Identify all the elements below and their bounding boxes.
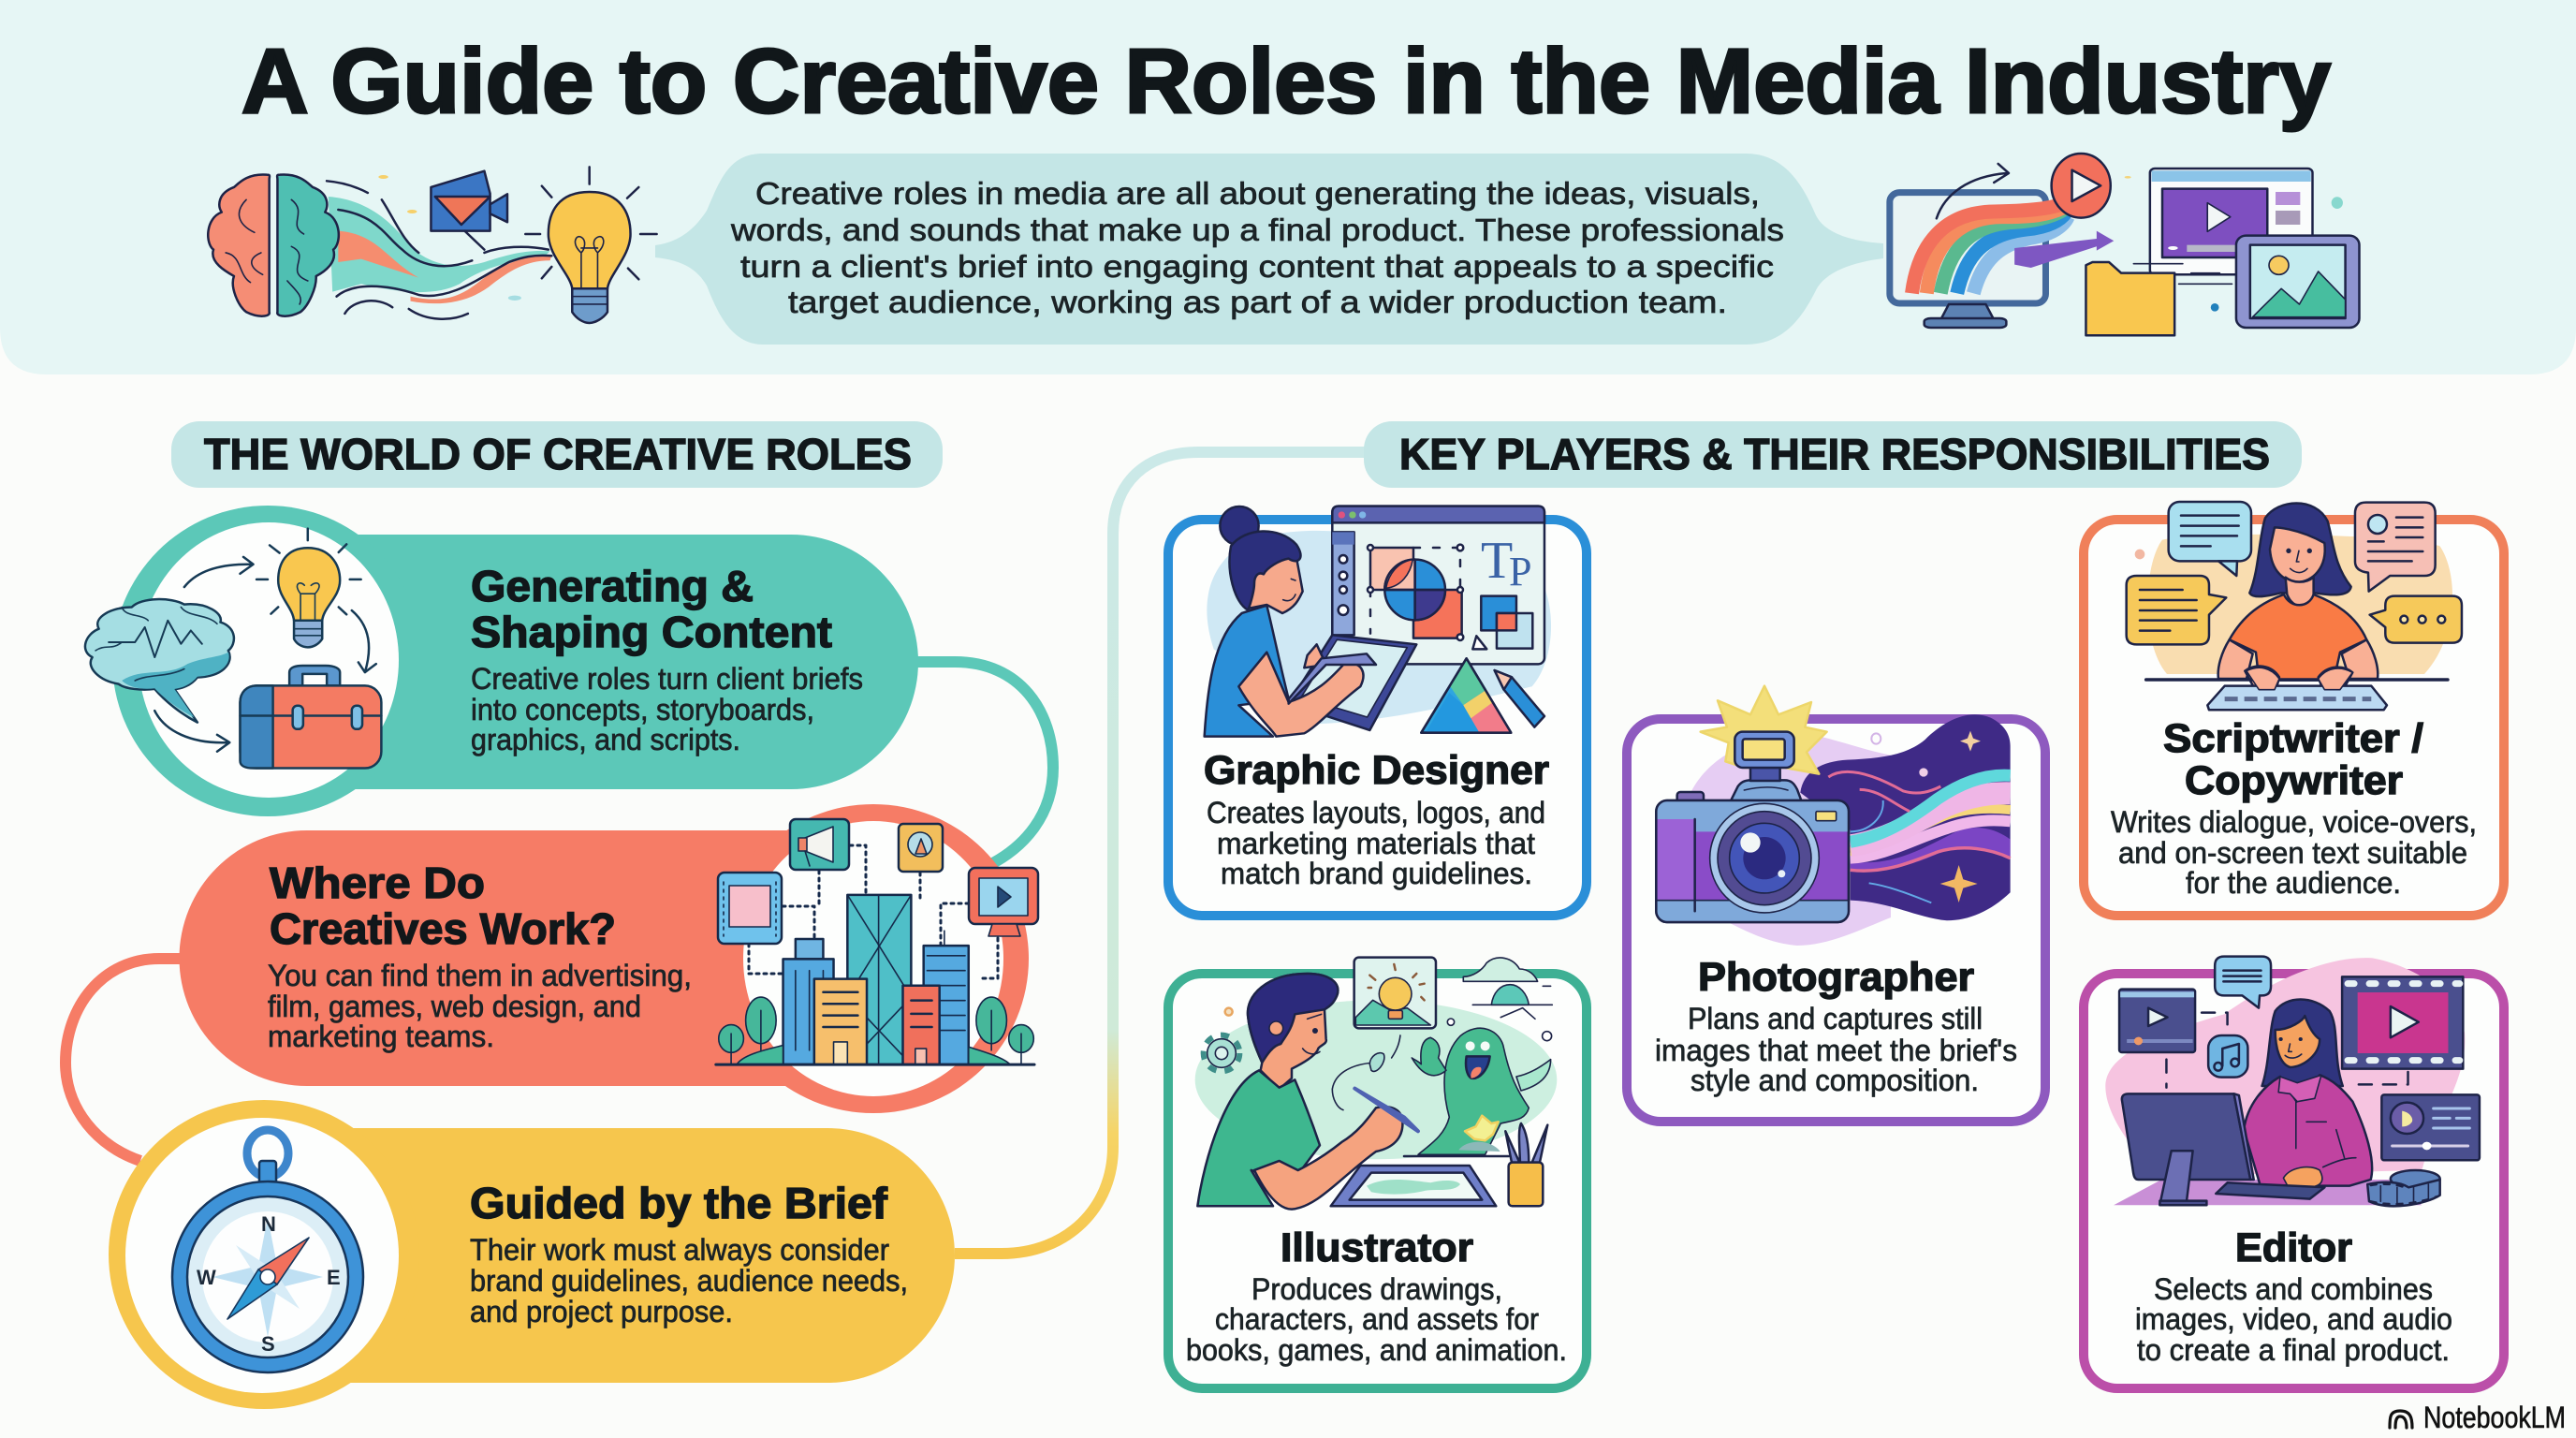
text: photographer: images that meet the brief's: [1655, 1034, 2017, 1067]
intro text: target audience, working as part of a wider production team.: [788, 285, 1727, 319]
icon: brain, bulb, toolbox cycle: [85, 529, 381, 769]
illustration: camera with light stream: [1656, 686, 2011, 946]
text: editor: Editor: [2235, 1225, 2352, 1270]
section heading: key players: [1364, 421, 2302, 488]
type sample glyphs: T: [1481, 532, 1513, 590]
text: where do creatives work: film, games, web design, and: [268, 990, 641, 1023]
text: generating and shaping content: graphics, and scripts.: [471, 723, 740, 756]
intro text: words, and sounds that make up a final product. These professionals: [730, 213, 1784, 247]
title: A Guide to Creative Roles in the Media Industry: [242, 30, 2331, 132]
intro text: Creative roles in media are all about generating the ideas, visuals,: [755, 176, 1760, 211]
text: generating and shaping content: into concepts, storyboards,: [471, 693, 814, 726]
section heading: key players: KEY PLAYERS & THEIR RESPONSIBILITIES: [1399, 430, 2270, 478]
text: editor: Selects and combines: [2154, 1272, 2433, 1306]
text: editor: [2135, 1225, 2452, 1367]
text: where do creatives work: marketing teams.: [268, 1020, 494, 1053]
text: scriptwriter / copywriter: Scriptwriter /: [2163, 716, 2423, 761]
connector: teal to coral: [913, 662, 1053, 866]
connector: coral to yellow: [66, 959, 183, 1161]
text: illustrator: [1186, 1225, 1567, 1367]
connector: roles panels to key players: [955, 452, 1385, 1254]
icon: brain to camera to lightbulb: [208, 167, 657, 323]
text: graphic designer: Graphic Designer: [1204, 748, 1549, 793]
text: guided by the brief: [470, 1179, 908, 1328]
card: editor: [2084, 957, 2504, 1388]
text: generating and shaping content: Generating &: [471, 562, 754, 610]
text: scriptwriter / copywriter: [2111, 716, 2477, 900]
text: photographer: [1655, 955, 2017, 1097]
compass letters: [197, 1212, 341, 1356]
text: graphic designer: marketing materials that: [1217, 827, 1535, 860]
type sample glyphs: P: [1509, 549, 1531, 594]
text: photographer: style and composition.: [1690, 1064, 1979, 1097]
compass letters: E: [327, 1266, 341, 1289]
illustration: writer with speech bubbles: [2127, 502, 2462, 710]
text: where do creatives work: Creatives Work?: [270, 904, 616, 953]
text: scriptwriter / copywriter: and on-screen text suitable: [2118, 836, 2467, 870]
text: graphic designer: match brand guidelines.: [1221, 857, 1532, 890]
text: where do creatives work: You can find them in advertising,: [268, 959, 692, 992]
text: guided by the brief: Guided by the Brief: [470, 1179, 888, 1227]
section heading: the world of creative roles: [171, 421, 943, 488]
intro text: turn a client's brief into engaging content that appeals to a specific: [740, 249, 1774, 284]
text: graphic designer: Creates layouts, logos, and: [1207, 796, 1545, 829]
card: illustrator: [1168, 958, 1587, 1388]
text: guided by the brief: Their work must always consider: [470, 1233, 889, 1267]
icon: compass: [172, 1130, 363, 1372]
type sample glyphs: [1481, 532, 1531, 594]
text: editor: to create a final product.: [2137, 1333, 2450, 1367]
text: illustrator: characters, and assets for: [1215, 1302, 1539, 1336]
compass letters: W: [197, 1266, 216, 1289]
compass letters: N: [261, 1212, 276, 1236]
card: scriptwriter / copywriter: [2084, 502, 2504, 916]
text: guided by the brief: and project purpose.: [470, 1295, 733, 1328]
text: scriptwriter / copywriter: for the audience.: [2186, 866, 2401, 900]
panel: generating and shaping content: [85, 506, 918, 816]
icon: monitor, rainbow, media windows: [1890, 154, 2359, 335]
text: scriptwriter / copywriter: Writes dialogue, voice-overs,: [2111, 805, 2477, 839]
text: illustrator: Illustrator: [1281, 1225, 1473, 1270]
text: photographer: Plans and captures still: [1688, 1002, 1983, 1035]
panel: where do creatives work: [180, 804, 1038, 1113]
text: illustrator: Produces drawings,: [1251, 1272, 1502, 1306]
illustration: illustrator drawing character: [1195, 958, 1557, 1210]
header band: [0, 0, 2576, 374]
section heading: the world of creative roles: THE WORLD OF CREATIVE ROLES: [204, 430, 912, 478]
icon: notebook arcs: [2390, 1411, 2412, 1428]
intro speech bubble: [655, 154, 1883, 345]
text: graphic designer: [1204, 748, 1549, 890]
text: where do creatives work: [268, 858, 692, 1053]
text: editor: images, video, and audio: [2135, 1302, 2452, 1336]
text: generating and shaping content: [471, 562, 863, 756]
illustration: designer at tablet: [1205, 506, 1551, 737]
text: where do creatives work: Where Do: [270, 858, 485, 907]
compass letters: S: [261, 1332, 275, 1356]
text: illustrator: books, games, and animation.: [1186, 1333, 1567, 1367]
text: photographer: Photographer: [1698, 955, 1974, 1000]
intro text: [730, 176, 1784, 319]
panel: guided by the brief: [109, 1100, 955, 1409]
text: scriptwriter / copywriter: Copywriter: [2185, 758, 2403, 803]
text: guided by the brief: brand guidelines, audience needs,: [470, 1264, 908, 1298]
text: generating and shaping content: Shaping Content: [471, 608, 832, 656]
text: generating and shaping content: Creative roles turn client briefs: [471, 662, 863, 696]
icon: city skyline with media tiles: [716, 819, 1038, 1064]
card: graphic designer: [1168, 506, 1587, 916]
illustration: editor at workstation: [2105, 957, 2480, 1206]
card: photographer: [1627, 686, 2045, 1122]
